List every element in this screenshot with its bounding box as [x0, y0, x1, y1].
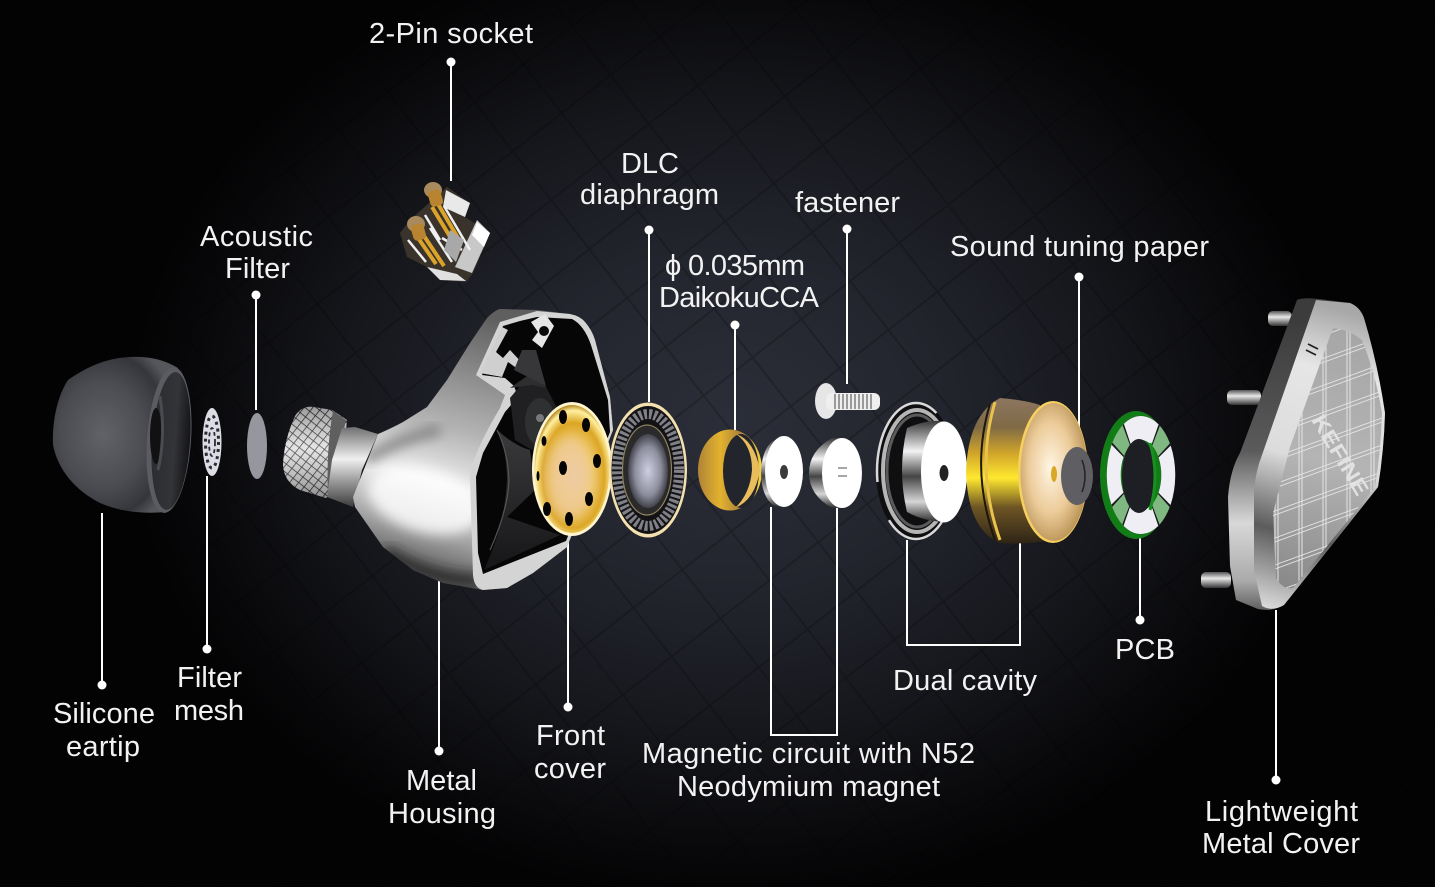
label: DaikokuCCA wire: ϕ 0.035mm — [665, 250, 805, 282]
label: metal housing: Metal — [406, 765, 477, 797]
icon: dual cavity gold — [966, 398, 1088, 544]
label: magnetic circuit: Neodymium magnet — [677, 771, 940, 803]
label: front cover — [534, 720, 606, 785]
cavity — [476, 317, 610, 574]
notches — [1306, 344, 1318, 355]
icon: acoustic filter — [247, 413, 267, 479]
icon: magnet disc — [761, 436, 803, 507]
label: metal housing — [388, 765, 496, 830]
label: metal housing: Housing — [388, 798, 496, 830]
icon: sound tuning paper — [1061, 447, 1093, 505]
label: DLC diaphragm — [580, 148, 719, 211]
label: filter mesh: mesh — [174, 695, 244, 727]
label: sound tuning paper: Sound tuning paper — [950, 231, 1209, 263]
highlight on body — [361, 430, 489, 580]
label: DaikokuCCA wire — [659, 250, 820, 314]
label: acoustic filter: Filter — [225, 253, 290, 285]
label: lightweight metal cover: Lightweight — [1205, 796, 1358, 828]
pins — [1201, 311, 1292, 588]
housing body — [353, 309, 613, 590]
icon: metal housing — [283, 309, 613, 590]
icon: silicone eartip — [53, 357, 196, 514]
icon: front cover — [532, 402, 612, 536]
label: acoustic filter: Acoustic — [200, 221, 313, 253]
label: DaikokuCCA wire: DaikokuCCA — [659, 282, 820, 314]
label: magnetic circuit — [642, 738, 975, 803]
label: filter mesh — [174, 662, 244, 727]
label: 2-Pin socket: 2-Pin socket — [369, 18, 533, 50]
label: lightweight metal cover: Metal Cover — [1202, 828, 1360, 860]
icon: gold ring DaikokuCCA — [698, 430, 762, 510]
plate grid — [1270, 325, 1386, 593]
label: silicone eartip — [53, 698, 155, 763]
label: magnetic circuit: Magnetic circuit with N52 — [642, 738, 975, 770]
label: DLC diaphragm: DLC — [621, 148, 679, 180]
label: dual cavity: Dual cavity — [893, 665, 1038, 697]
label: front cover: Front — [536, 720, 605, 752]
label: front cover: cover — [534, 753, 606, 785]
label: lightweight metal cover — [1202, 796, 1360, 860]
neck — [327, 427, 378, 507]
label: silicone eartip: Silicone — [53, 698, 155, 730]
bevel — [1254, 300, 1385, 609]
label: silicone eartip: eartip — [66, 731, 140, 763]
leader lines and dots — [98, 58, 1280, 784]
icon: dual cavity front — [876, 402, 967, 540]
icon: 2-pin socket — [400, 182, 490, 282]
brand: KEFINE — [1307, 411, 1373, 500]
port ribs — [480, 314, 554, 386]
label: filter mesh: Filter — [177, 662, 242, 694]
icon: DLC diaphragm — [609, 402, 687, 538]
interior shelf — [484, 374, 560, 570]
icon: filter mesh — [202, 408, 222, 476]
label: fastener: fastener — [795, 187, 900, 219]
label: acoustic filter — [200, 221, 313, 285]
icon: neodymium magnet cylinder — [809, 438, 862, 508]
plate — [1273, 328, 1382, 588]
outer frame — [1228, 298, 1385, 610]
label: DLC diaphragm: diaphragm — [580, 179, 719, 211]
icon: fastener screw — [815, 383, 880, 419]
cut-face rim — [470, 311, 613, 590]
knurled nut — [283, 407, 347, 498]
label: PCB: PCB — [1115, 634, 1175, 666]
icon: lightweight metal cover — [1201, 298, 1386, 610]
icon: PCB — [1100, 411, 1172, 539]
